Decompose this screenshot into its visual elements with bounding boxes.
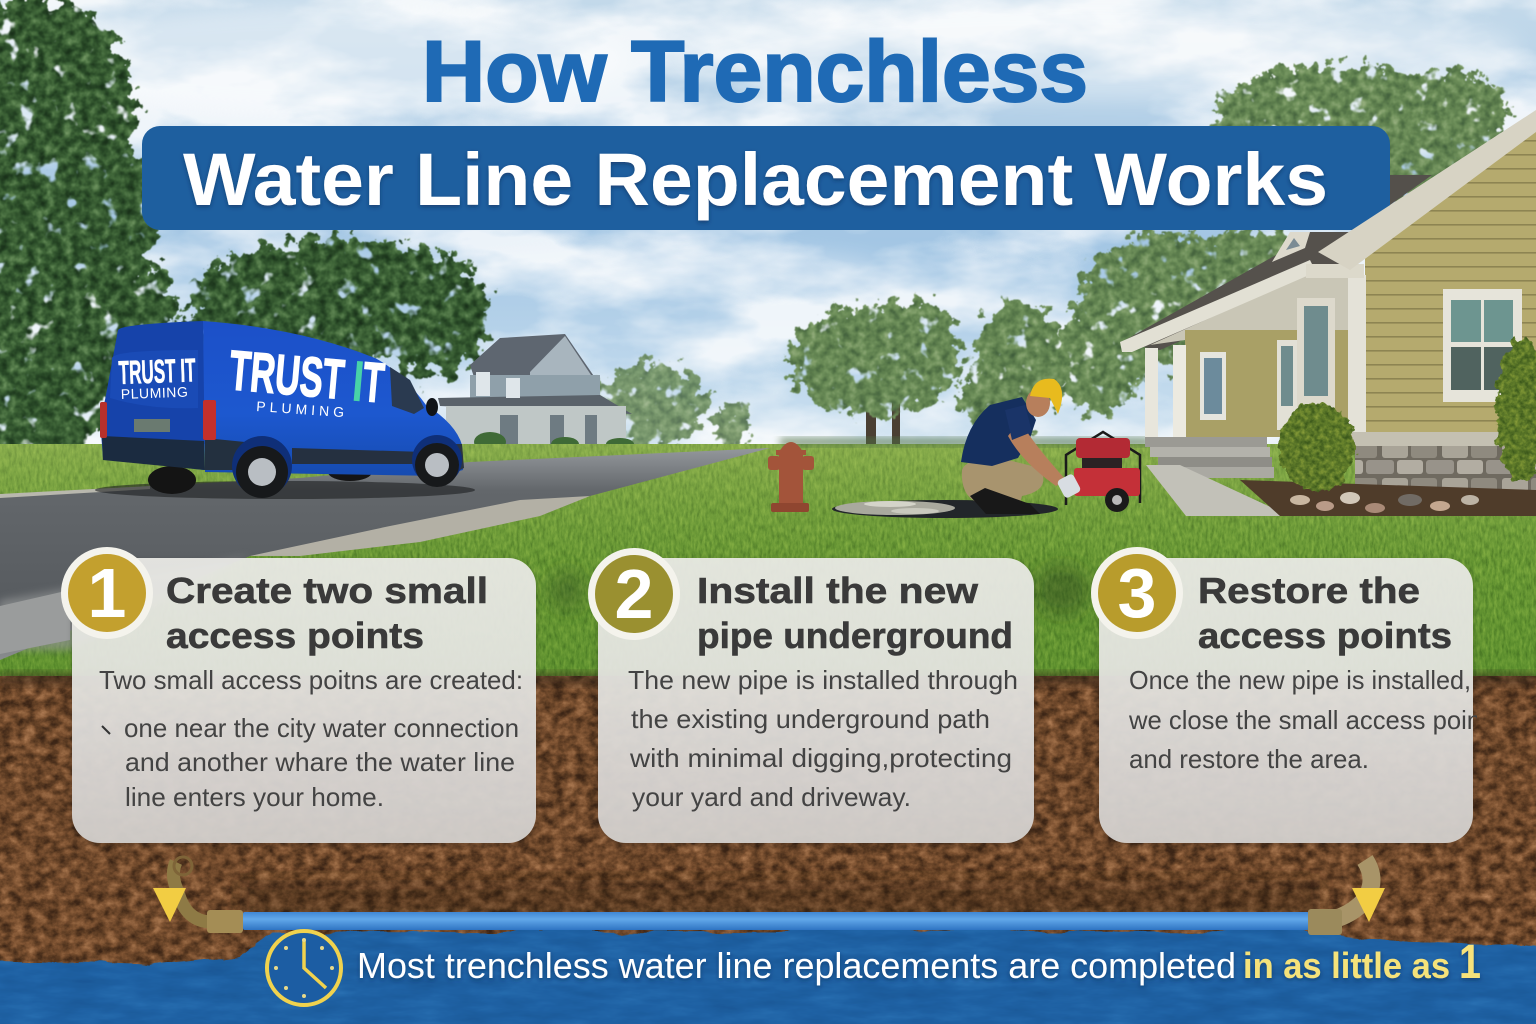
van: PLUMING: [256, 398, 345, 420]
tree: behind house upper right: [1210, 65, 1530, 206]
water band bottom: [0, 930, 1536, 1024]
step 1 heading: Create two small: [166, 570, 488, 611]
step 1 heading: [166, 570, 488, 656]
roof rake overlapping banner corner: [1318, 110, 1536, 270]
step 3 body text: and restore the area.: [1129, 744, 1369, 774]
van: TRUST IT: [118, 351, 196, 391]
step 3 number badge: [1091, 547, 1183, 639]
soil underground: [0, 672, 1536, 976]
generator: [1066, 432, 1140, 512]
icon: left yellow arrow: [153, 888, 186, 922]
step 2 heading: Install the new: [697, 570, 979, 611]
step 2 body text: the existing underground path: [631, 704, 990, 734]
tree: behind van: [140, 238, 490, 450]
icon: right yellow arrow: [1352, 888, 1385, 922]
van: TRUST IT: [227, 338, 387, 414]
step 2 number badge: 2: [615, 555, 653, 633]
pipe: new blue water line: [243, 912, 1309, 930]
title banner: Water Line Replacement Works: [183, 138, 1328, 221]
icon: clock: [267, 931, 341, 1005]
step 2 heading: pipe underground: [697, 615, 1013, 656]
footer message: Most trenchless water line replacements are completed: [357, 945, 1236, 986]
step 2 body text: with minimal digging,protecting: [629, 743, 1012, 773]
step 3 body text: [1129, 670, 1477, 768]
step 3 body text: Once the new pipe is installed,: [1129, 665, 1471, 695]
step 2 body text: The new pipe is installed through: [628, 665, 1018, 695]
step 2 heading: [697, 570, 1013, 656]
tree: behind house porch: [1055, 230, 1320, 415]
walkway: [1146, 465, 1290, 516]
step 2 body text: [628, 665, 1018, 812]
tree: large left: [0, 0, 180, 460]
road: [0, 448, 770, 660]
panel: step 3: [1091, 547, 1501, 843]
house: [1120, 122, 1536, 494]
step 1 body text: Two small access poitns are created:: [99, 665, 523, 695]
step 1 body text: one near the city water connection: [124, 713, 519, 743]
step 3 body text: we close the small access points: [1128, 705, 1501, 735]
step 1 body text: line enters your home.: [125, 782, 384, 812]
left brass fitting: [173, 857, 243, 933]
title: How Trenchless: [422, 24, 1088, 120]
trees: center background: [787, 300, 1066, 447]
work pit mat with paving stones: [832, 500, 1058, 518]
step 1 number badge: 1: [88, 554, 126, 632]
far house: [438, 334, 634, 452]
step 2 number badge: [588, 548, 680, 640]
lawn: [0, 438, 1536, 684]
sidewalk: [0, 486, 590, 556]
step 3 heading: [1198, 570, 1452, 656]
step 3 heading: Restore the: [1198, 570, 1420, 611]
porch steps: [1145, 437, 1274, 478]
van: [95, 321, 475, 499]
step 1 body text: [99, 665, 523, 812]
step 1 number badge: [61, 547, 153, 639]
footer message: [357, 936, 1481, 989]
step 1 body text: and another whare the water line: [125, 747, 515, 777]
shrub by house: [1279, 403, 1355, 491]
fire hydrant: [768, 442, 814, 512]
flower bed rocks: [1240, 480, 1536, 516]
worker: [961, 379, 1082, 514]
grass shadow patches between cards: [549, 564, 1090, 616]
step 3 heading: access points: [1198, 615, 1452, 656]
bottom-left pavement: [0, 590, 70, 654]
van: PLUMING: [121, 384, 188, 402]
panel: step 2: [588, 548, 1034, 843]
step 2 body text: your yard and driveway.: [632, 782, 911, 812]
step 3 number badge: 3: [1118, 554, 1156, 632]
shrub right edge: [1496, 338, 1536, 482]
background: sky with clouds: [0, 0, 1536, 480]
footer message: in as little as: [1243, 945, 1450, 986]
distant tree line: [581, 363, 750, 447]
footer message: 1: [1459, 936, 1481, 989]
right brass fitting: [1308, 860, 1372, 935]
panel: step 1: [61, 547, 536, 843]
step 1 heading: access points: [166, 615, 424, 656]
